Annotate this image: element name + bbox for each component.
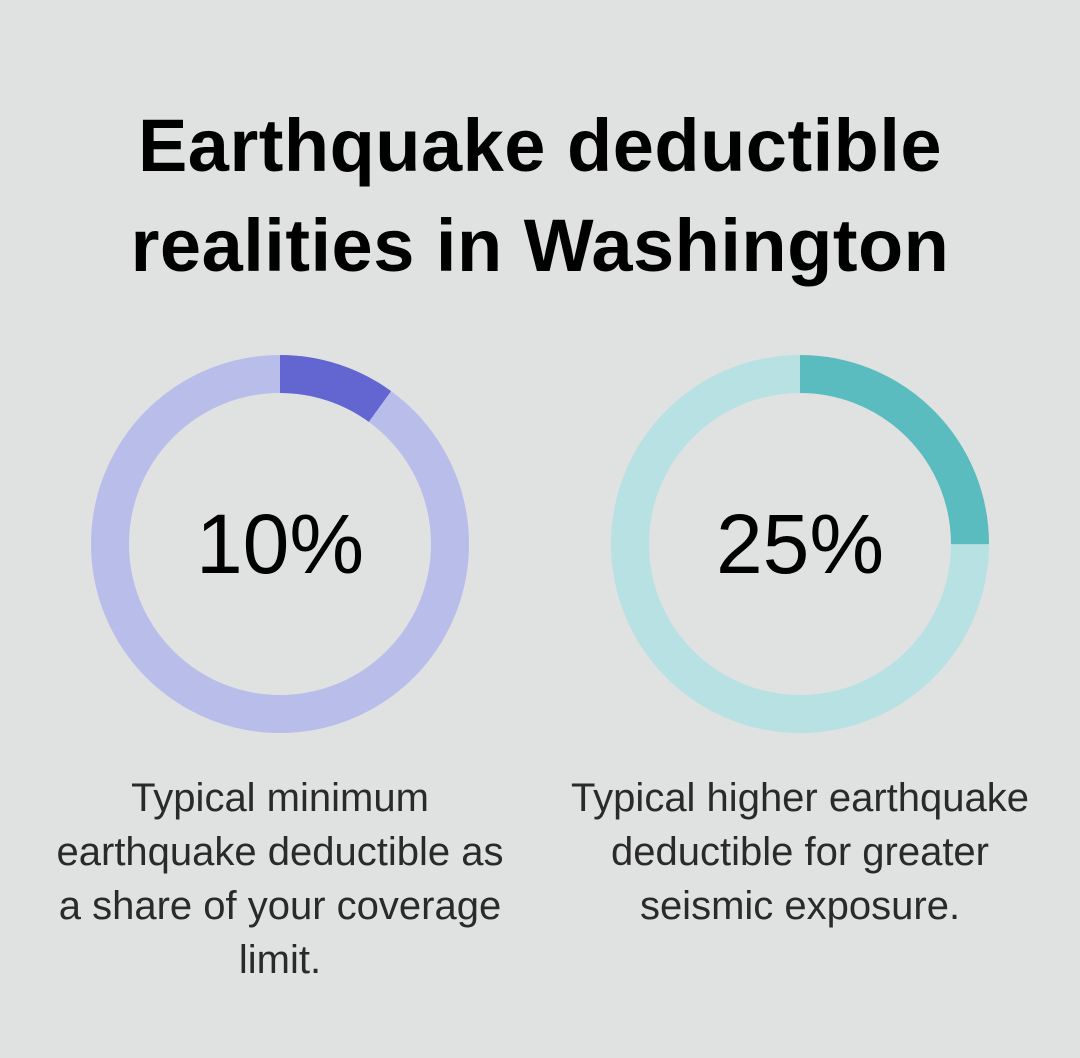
- caption: right: [571, 776, 1029, 928]
- title: Earthquake deductible: [138, 104, 942, 187]
- value: 25%: 25%: [716, 497, 884, 591]
- caption: left: Typical minimum: [131, 776, 429, 820]
- caption: right: Typical higher earthquake: [571, 776, 1029, 820]
- title: [131, 104, 949, 287]
- title: realities in Washington: [131, 204, 949, 287]
- donut chart: 10%: [91, 355, 469, 733]
- caption: right: seismic exposure.: [640, 884, 960, 928]
- caption: right: deductible for greater: [611, 830, 989, 874]
- caption: left: limit.: [239, 938, 321, 982]
- caption: left: earthquake deductible as: [56, 830, 504, 874]
- value: 10%: 10%: [196, 497, 364, 591]
- caption: left: a share of your coverage: [59, 884, 501, 928]
- caption: left: [56, 776, 504, 982]
- donut chart: 25%: [611, 355, 989, 733]
